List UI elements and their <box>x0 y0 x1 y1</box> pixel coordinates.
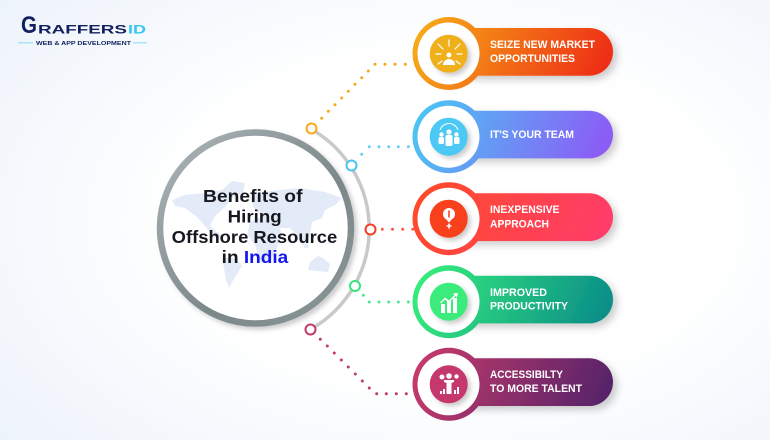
panel: inexpensive approach <box>412 182 613 255</box>
icon: market burst <box>430 35 468 73</box>
logo wordmark: G <box>21 12 37 39</box>
label <box>490 369 583 395</box>
central title: Offshore Resource <box>172 227 337 247</box>
arc node: red <box>366 224 376 234</box>
label: TO MORE TALENT <box>490 383 583 395</box>
world map <box>172 181 342 288</box>
panel: accessibility <box>412 348 613 421</box>
connector arc <box>311 129 369 329</box>
label: INEXPENSIVE <box>490 204 560 216</box>
panel: improved productivity <box>412 265 613 338</box>
logo <box>18 12 147 47</box>
logo wordmark <box>21 12 147 39</box>
dotted connector: orange <box>320 63 407 120</box>
arc node: green <box>350 281 360 291</box>
central title: in India <box>222 247 288 267</box>
label: IT'S YOUR TEAM <box>490 129 574 141</box>
logo tagline: WEB & APP DEVELOPMENT <box>36 41 132 47</box>
arc node: magenta <box>306 324 316 334</box>
label: IMPROVED <box>490 287 547 299</box>
icon: team <box>430 118 468 156</box>
logo wordmark: RAFFERS <box>38 22 127 36</box>
logo wordmark: ID <box>128 22 147 36</box>
label <box>490 39 596 65</box>
icon: growth chart <box>430 283 468 321</box>
label: PRODUCTIVITY <box>490 301 568 313</box>
label: SEIZE NEW MARKET <box>490 39 596 51</box>
central circle <box>160 132 351 324</box>
arc node: blue <box>346 160 356 170</box>
label: ACCESSIBILTY <box>490 369 563 381</box>
dotted connector: magenta <box>319 338 408 395</box>
panel: seize new market <box>412 17 613 90</box>
label: APPROACH <box>490 218 549 230</box>
arc node: orange <box>306 124 316 134</box>
icon: money drop <box>430 200 468 238</box>
central title <box>172 186 337 267</box>
dotted connector: green <box>362 294 410 304</box>
icon: talent <box>430 365 468 403</box>
dotted connector: blue <box>360 145 410 156</box>
central title: Benefits of <box>203 186 303 206</box>
label <box>490 287 568 313</box>
central title: Hiring <box>228 206 282 226</box>
panel: your team <box>412 100 613 173</box>
label: OPPORTUNITIES <box>490 53 575 65</box>
label <box>490 204 560 230</box>
dotted connector: red <box>381 228 414 231</box>
